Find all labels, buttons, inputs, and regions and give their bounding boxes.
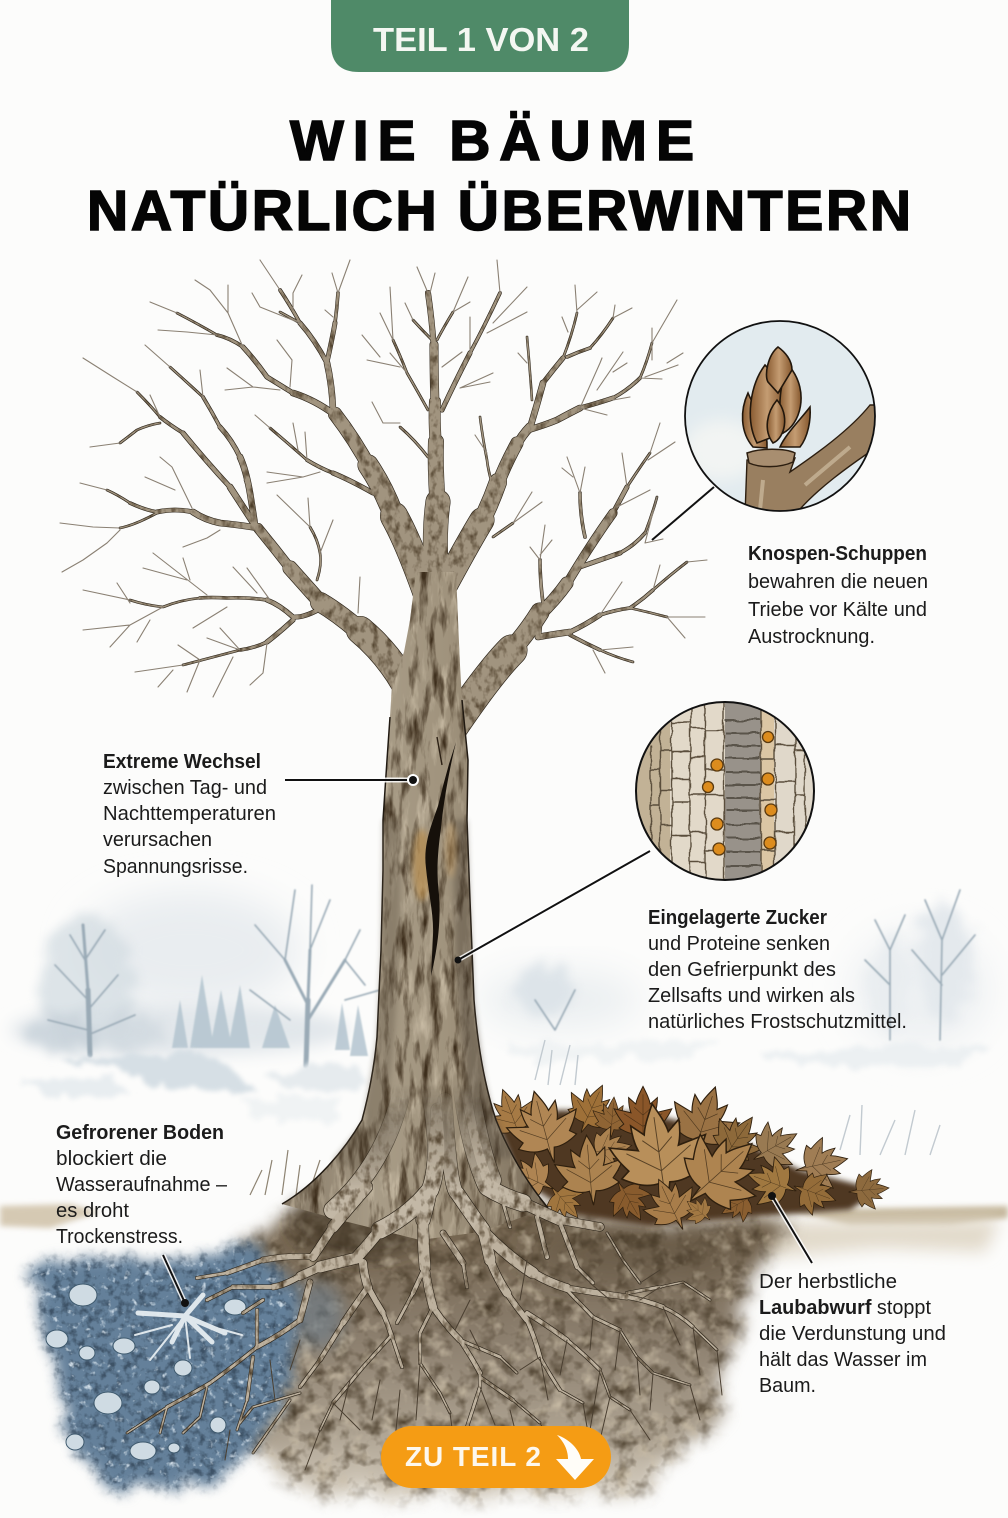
text: Gefrorener Boden <box>56 1122 228 1248</box>
text: Laubabwurf: die Verdunstung und <box>759 1323 946 1345</box>
tree trunk <box>282 572 548 1240</box>
frozen soil <box>30 1245 300 1490</box>
text: Extreme Wechsel: verursachen <box>103 829 212 851</box>
text: Eingelagerte Zucker: und Proteine senken <box>648 933 830 955</box>
trees <box>48 885 975 1066</box>
text: Gefrorener Boden: blockiert die <box>56 1148 167 1170</box>
soil darkening <box>290 1190 430 1260</box>
title <box>87 109 911 243</box>
inset: cells <box>636 700 816 890</box>
limbs <box>107 290 687 728</box>
text: Extreme Wechsel <box>103 751 276 878</box>
text: Knospen-Schuppen: Knospen-Schuppen <box>748 543 927 565</box>
connector: leaves <box>768 1192 812 1263</box>
text: Eingelagerte Zucker: natürliches Frostschutzmittel. <box>648 1011 907 1033</box>
ground surface and soil <box>0 1190 1008 1495</box>
conifers <box>172 975 368 1056</box>
tree foliage <box>26 898 973 1053</box>
cell walls <box>651 700 805 890</box>
text: Knospen-Schuppen <box>748 543 928 648</box>
snow patches <box>20 1040 985 1120</box>
text: Eingelagerte Zucker: Eingelagerte Zucker <box>648 907 827 929</box>
ice crystal <box>135 1295 242 1360</box>
connector: bud <box>652 487 714 540</box>
bud scales <box>743 347 810 448</box>
text: Gefrorener Boden: Trockenstress. <box>56 1226 183 1248</box>
amber tint <box>413 829 431 901</box>
text: Knospen-Schuppen: Austrocknung. <box>748 626 875 648</box>
top badge <box>331 0 629 72</box>
text: Eingelagerte Zucker: Zellsafts und wirken als <box>648 985 855 1007</box>
roots <box>127 1090 722 1470</box>
text: Gefrorener Boden: Gefrorener Boden <box>56 1122 224 1144</box>
orange sugar cells <box>702 732 777 855</box>
connector: crack <box>285 774 419 786</box>
trunk edges <box>282 700 548 1208</box>
bud ring <box>747 449 795 467</box>
fine rootlets <box>225 1260 722 1470</box>
text: Knospen-Schuppen: Triebe vor Kälte und <box>748 599 927 621</box>
text: Knospen-Schuppen: bewahren die neuen <box>748 571 928 593</box>
text: Extreme Wechsel: Nachttemperaturen <box>103 803 276 825</box>
winter grass <box>535 1040 940 1155</box>
button: next part <box>381 1426 611 1488</box>
icon: down arrow <box>556 1435 594 1480</box>
text: Laubabwurf <box>759 1271 946 1397</box>
horizon strips <box>0 1204 100 1228</box>
button: next part: ZU TEIL 2 <box>405 1441 541 1472</box>
text: Gefrorener Boden: es droht <box>56 1200 129 1222</box>
connector: cells <box>454 851 650 964</box>
connector: frozen ground <box>163 1255 189 1307</box>
text: Extreme Wechsel: Extreme Wechsel <box>103 751 261 773</box>
snow grass at trunk <box>250 1150 320 1195</box>
title: WIE BÄUME <box>290 109 694 173</box>
text: Eingelagerte Zucker: den Gefrierpunkt des <box>648 959 836 981</box>
tree crown <box>60 260 707 728</box>
top badge: TEIL 1 VON 2 <box>373 21 589 58</box>
trunk shading <box>333 820 400 1180</box>
inset: bud <box>684 321 880 515</box>
title: NATÜRLICH ÜBERWINTERN <box>87 179 911 243</box>
twig <box>745 405 880 515</box>
text: Eingelagerte Zucker <box>648 907 907 1033</box>
twigs <box>60 260 707 697</box>
haze <box>80 890 300 1010</box>
text: Laubabwurf: Laubabwurf stoppt <box>759 1297 931 1319</box>
text: Laubabwurf: Der herbstliche <box>759 1271 897 1293</box>
text: Extreme Wechsel: zwischen Tag- und <box>103 777 267 799</box>
ice stones <box>46 1284 246 1460</box>
text: Laubabwurf: Baum. <box>759 1375 816 1397</box>
grey vessel <box>725 700 761 890</box>
text: Laubabwurf: hält das Wasser im <box>759 1349 927 1371</box>
distant winter landscape <box>10 885 990 1195</box>
text: Extreme Wechsel: Spannungsrisse. <box>103 856 248 878</box>
soil body <box>225 1200 790 1495</box>
leaf pile <box>478 1075 891 1241</box>
crack <box>425 742 456 976</box>
text: Gefrorener Boden: Wasseraufnahme – <box>56 1174 228 1196</box>
